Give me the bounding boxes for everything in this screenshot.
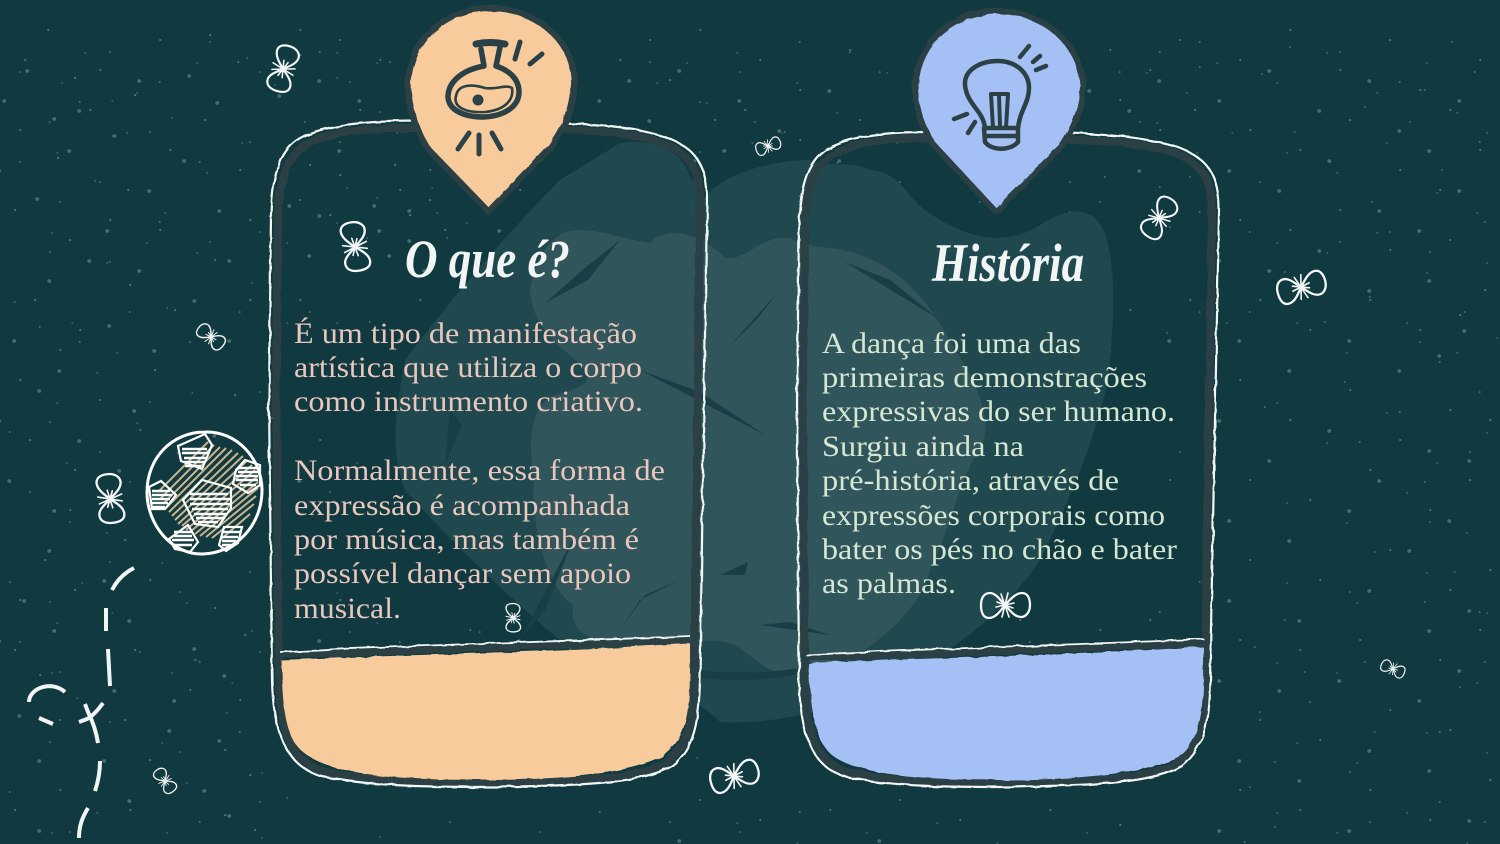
heading: O que é? [405, 229, 570, 289]
knot 6 [152, 766, 178, 796]
leaf veins [445, 240, 940, 680]
card divider [806, 639, 1204, 659]
knot 9 [981, 593, 1030, 618]
body text: como instrumento criativo. [294, 385, 643, 418]
body text: expressivas do ser humano. [822, 395, 1175, 428]
card divider [280, 636, 690, 656]
body text: musical. [294, 592, 401, 625]
body text: pré-história, através de [822, 464, 1119, 497]
body text: as palmas. [822, 567, 956, 600]
body text: possível dançar sem apoio [294, 557, 631, 590]
card outline [797, 132, 1219, 787]
knot 7 [708, 758, 762, 795]
soccer ball [147, 432, 262, 554]
icon: flask [448, 42, 542, 154]
pin: flask [408, 8, 574, 212]
outer leaf shape [396, 142, 1113, 723]
body text: expressões corporais como [822, 499, 1165, 532]
knot 12 [1379, 658, 1407, 680]
card footer [281, 643, 690, 780]
decorative knots [96, 43, 1407, 796]
ball hatching [158, 442, 258, 540]
knot 4 [96, 473, 125, 524]
knot 8 [754, 136, 783, 157]
body text: É um tipo de manifestação [294, 317, 637, 350]
inner leaf shape [530, 230, 985, 672]
ball outline [147, 432, 262, 554]
body text: artística que utiliza o corpo [294, 351, 642, 384]
dashed treasure path with X [29, 568, 134, 838]
knot 3 [194, 321, 228, 352]
pin shape [915, 11, 1083, 212]
body text: A dança foi uma das [822, 327, 1081, 360]
body text [822, 327, 1177, 600]
knot 1 [265, 43, 302, 95]
knot 11 [1275, 269, 1329, 306]
body text [294, 317, 665, 625]
body text: bater os pés no chão e bater [822, 533, 1177, 566]
background leaf illustration [396, 142, 1113, 723]
body text: por música, mas também é [294, 523, 639, 556]
knot 5 [506, 604, 521, 632]
heading: História [931, 233, 1084, 293]
card outline [269, 121, 707, 787]
knot 10 [1138, 193, 1181, 242]
body text: Normalmente, essa forma de [294, 454, 665, 487]
body text: primeiras demonstrações [822, 361, 1147, 394]
card footer [808, 646, 1203, 780]
pin shape [408, 8, 574, 212]
ball patches [149, 434, 260, 552]
icon: light bulb [954, 46, 1046, 149]
knot 2 [340, 220, 371, 272]
pin: light bulb [915, 11, 1083, 212]
body text: Surgiu ainda na [822, 430, 1024, 463]
card: História [797, 132, 1219, 787]
card: O que é? [269, 121, 707, 787]
body text: expressão é acompanhada [294, 489, 630, 522]
